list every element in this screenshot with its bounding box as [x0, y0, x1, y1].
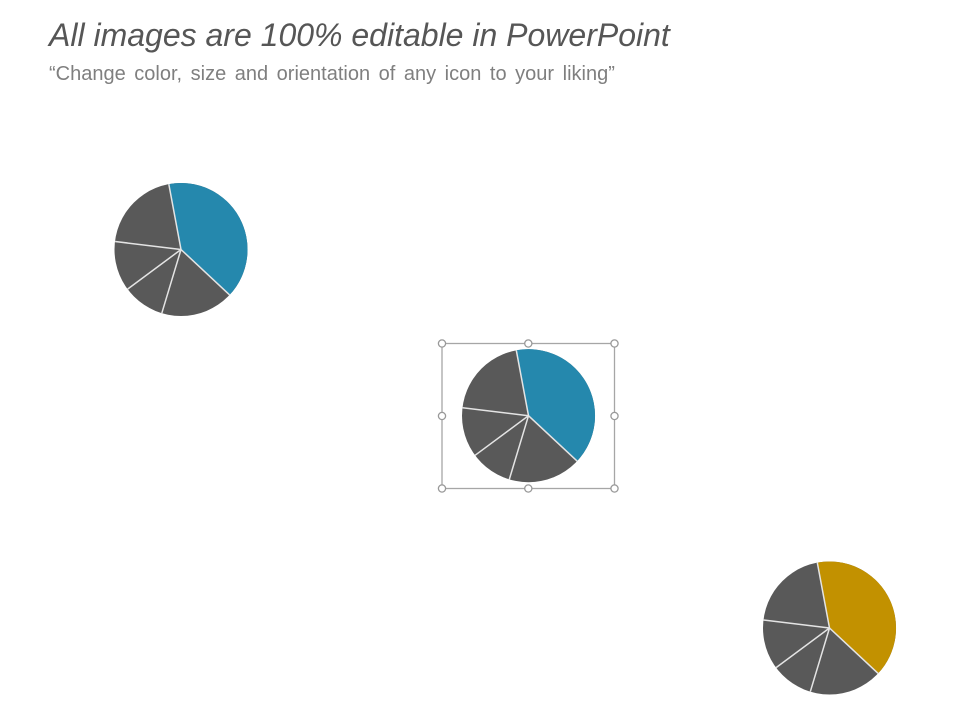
- pie chart: top left, blue: [114, 183, 248, 316]
- pie chart: center, blue, selected: [462, 349, 595, 482]
- title: All images are 100% editable in PowerPoint: [47, 17, 671, 53]
- selection frame with handles: [438, 340, 618, 492]
- subtitle: “Change color, size and orientation of any icon to your liking”: [49, 63, 615, 85]
- pie chart: bottom right, gold: [763, 561, 896, 694]
